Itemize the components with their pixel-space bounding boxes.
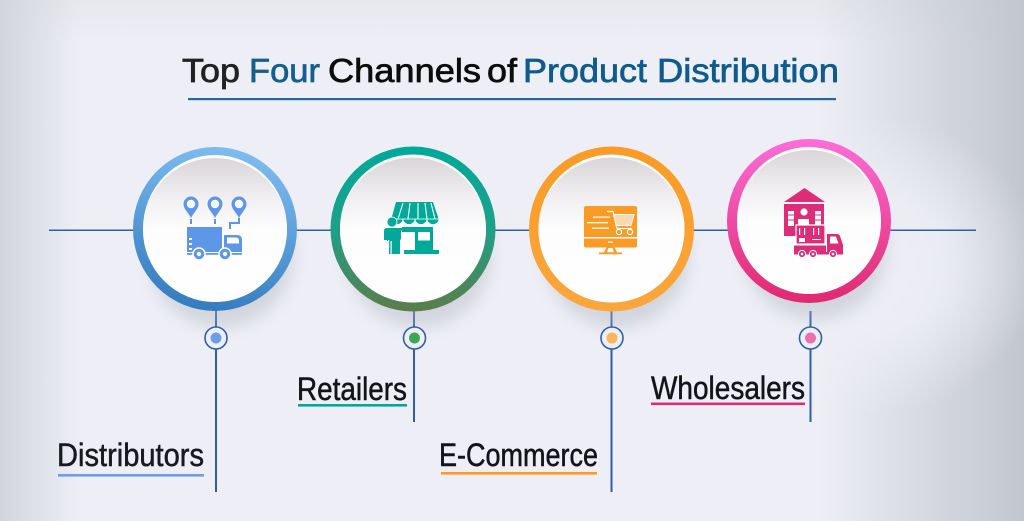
- stem line: Retailers: [413, 305, 415, 422]
- channel: Distributors: [57, 147, 297, 492]
- icon: warehouse with delivery truck: [784, 188, 843, 258]
- title: of: [487, 52, 518, 89]
- node dot: Retailers: [404, 327, 426, 349]
- node dot: Wholesalers: [800, 327, 822, 349]
- title: Product: [523, 52, 647, 89]
- icon: delivery truck with location pins: [184, 196, 246, 260]
- label: Retailers: Retailers: [297, 371, 407, 407]
- title: Top: [182, 52, 240, 89]
- horizontal connector line: [49, 230, 976, 231]
- node dot: E-Commerce: [601, 327, 623, 349]
- title: Four: [249, 52, 320, 89]
- channel: Wholesalers: [651, 139, 891, 422]
- circle badge: Wholesalers: [727, 139, 891, 320]
- title: Channels: [328, 52, 481, 89]
- node dot: Distributors: [205, 327, 227, 349]
- title: [182, 52, 839, 100]
- circle badge: Retailers: [330, 146, 496, 328]
- stem line: E-Commerce: [610, 305, 612, 492]
- circle badge: E-Commerce: [529, 146, 694, 328]
- channel: E-Commerce: [439, 146, 694, 492]
- stem line: Wholesalers: [810, 311, 812, 422]
- title: Distribution: [657, 52, 839, 89]
- label: Wholesalers: Wholesalers: [651, 370, 805, 406]
- channel: Retailers: [297, 146, 496, 422]
- icon: storefront with person: [384, 202, 439, 254]
- label: Distributors: Distributors: [57, 437, 204, 473]
- stem line: Distributors: [215, 305, 217, 492]
- circle badge: Distributors: [133, 147, 297, 328]
- label: E-Commerce: E-Commerce: [439, 437, 598, 473]
- icon: computer monitor with shopping cart: [584, 206, 637, 254]
